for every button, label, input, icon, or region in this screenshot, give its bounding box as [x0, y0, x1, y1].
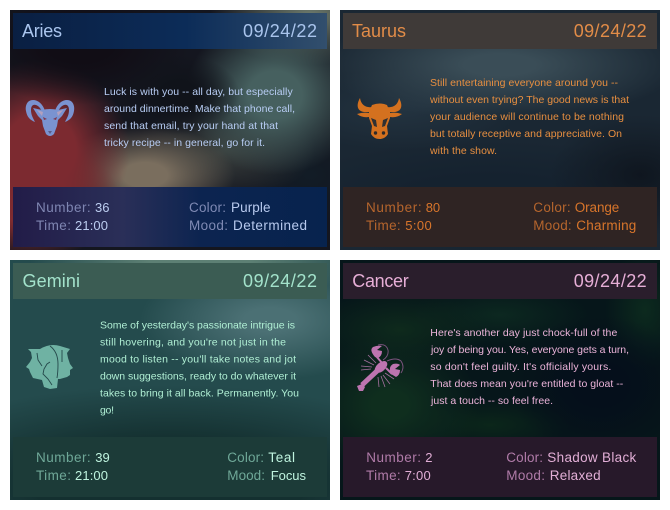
horoscope text: Cancer: That does mean you're entitled to gloat --: [430, 378, 624, 390]
footer stats: Cancer: 2: [425, 450, 433, 465]
card: Cancer: [340, 260, 660, 500]
horoscope text: Gemini: still hovering, and you're not just in the: [100, 336, 286, 348]
horoscope text: Gemini: down suggestions, ready to do whatever it: [100, 370, 296, 382]
horoscope text: Cancer: [430, 327, 629, 407]
footer stats: Gemini: [13, 437, 327, 497]
horoscope text: Taurus: Still entertaining everyone around you --: [430, 77, 618, 89]
footer stats: Aries: Determined: [233, 218, 307, 233]
footer stats: Aries: Mood:: [189, 218, 228, 233]
sign name: Cancer: Cancer: [352, 271, 409, 291]
footer stats: Gemini: Focus: [271, 468, 306, 483]
horoscope text: Cancer: so don't feel guilty. It's officially yours.: [430, 361, 611, 373]
sign name: Taurus: Taurus: [352, 21, 406, 41]
horoscope text: Aries: [104, 86, 295, 149]
footer stats: Aries: Time:: [36, 218, 71, 233]
footer stats: Gemini: Time:: [36, 468, 71, 483]
date: Cancer: 09/24/22: [574, 271, 647, 291]
background: Taurus blurred photo: [340, 10, 660, 250]
horoscope text: Taurus: [429, 77, 629, 157]
horoscope text: Gemini: [100, 320, 299, 416]
footer stats: Taurus: Mood:: [533, 218, 572, 233]
footer stats: Aries: 36: [95, 200, 109, 215]
horoscope text: Aries: tricky recipe -- in general, go for it.: [104, 137, 265, 149]
footer stats: Taurus: Color:: [533, 200, 571, 215]
card: Taurus: [340, 10, 660, 250]
icon: ram: [26, 100, 74, 136]
horoscope text: Cancer: Here's another day just chock-full of the: [430, 327, 617, 339]
sign name: Aries: Aries: [22, 21, 62, 41]
card: Aries: [10, 10, 330, 250]
footer stats: Taurus: Orange: [575, 200, 619, 215]
background: Cancer blurred photo: [340, 260, 660, 500]
date: Taurus: 09/24/22: [574, 21, 647, 41]
header bar: Aries: [13, 13, 327, 49]
icon: gemini twins: [26, 345, 73, 389]
footer stats: Gemini: Number:: [36, 450, 91, 465]
footer stats: Taurus: Number:: [366, 200, 422, 215]
horoscope text: Taurus: with the show.: [429, 145, 497, 157]
footer stats: Aries: Number:: [36, 200, 91, 215]
footer stats: Aries: Color:: [189, 200, 226, 215]
footer stats: Aries: Purple: [231, 200, 270, 215]
footer stats: Gemini: Color:: [227, 450, 264, 465]
date: Aries: 09/24/22: [243, 21, 317, 41]
sign name: Gemini: Gemini: [22, 271, 80, 291]
footer stats: Aries: 21:00: [75, 218, 108, 233]
footer stats: Cancer: Color:: [506, 450, 543, 465]
horoscope text: Gemini: Some of yesterday's passionate intrigue is: [100, 320, 295, 332]
horoscope text: Taurus: but totally receptive and appreciative. On: [430, 128, 622, 140]
icon: lobster: [357, 345, 403, 391]
footer stats: Cancer: [343, 437, 657, 497]
header bar: Gemini: [13, 263, 327, 299]
card: Gemini: [10, 260, 330, 500]
horoscope text: Taurus: your audience will continue to be nothing: [430, 111, 624, 123]
horoscope text: Taurus: without even trying? The good news is that: [429, 94, 629, 106]
horoscope text: Gemini: go!: [100, 404, 114, 416]
footer stats: Cancer: Relaxed: [550, 468, 601, 483]
footer stats: Aries: [13, 187, 327, 247]
background: Aries blurred photo: [10, 10, 330, 250]
footer stats: Cancer: 7:00: [405, 468, 431, 483]
footer stats: Cancer: Mood:: [506, 468, 545, 483]
date: Gemini: 09/24/22: [243, 271, 317, 291]
horoscope text: Cancer: joy of being you. Yes, everyone gets a turn,: [430, 344, 629, 356]
footer stats: Cancer: Time:: [366, 468, 401, 483]
horoscope text: Gemini: takes to bring it all back. Permanently. You: [100, 388, 299, 400]
icon: bull: [357, 98, 402, 139]
horoscope text: Aries: Luck is with you -- all day, but especially: [104, 86, 293, 98]
footer stats: Gemini: Teal: [268, 450, 295, 465]
horoscope text: Aries: around dinnertime. Make that phone call,: [104, 103, 295, 115]
horoscope text: Cancer: just a touch -- so feel free.: [430, 395, 553, 407]
footer stats: Cancer: Shadow Black: [547, 450, 637, 465]
footer stats: Gemini: 39: [95, 450, 110, 465]
footer stats: Gemini: Mood:: [227, 468, 265, 483]
header bar: Cancer: [343, 263, 657, 299]
footer stats: Taurus: Time:: [366, 218, 401, 233]
footer stats: Cancer: Number:: [366, 450, 421, 465]
horoscope text: Gemini: mood to listen -- you'll take notes and jot: [100, 354, 296, 366]
footer stats: Taurus: [343, 187, 657, 247]
background: Gemini blurred photo: [10, 260, 330, 500]
footer stats: Taurus: 5:00: [405, 218, 432, 233]
header bar: Taurus: [343, 13, 657, 49]
footer stats: Taurus: 80: [426, 200, 440, 215]
footer stats: Taurus: Charming: [576, 218, 636, 233]
horoscope text: Aries: send that email, try your hand at that: [104, 120, 278, 132]
footer stats: Gemini: 21:00: [75, 468, 108, 483]
